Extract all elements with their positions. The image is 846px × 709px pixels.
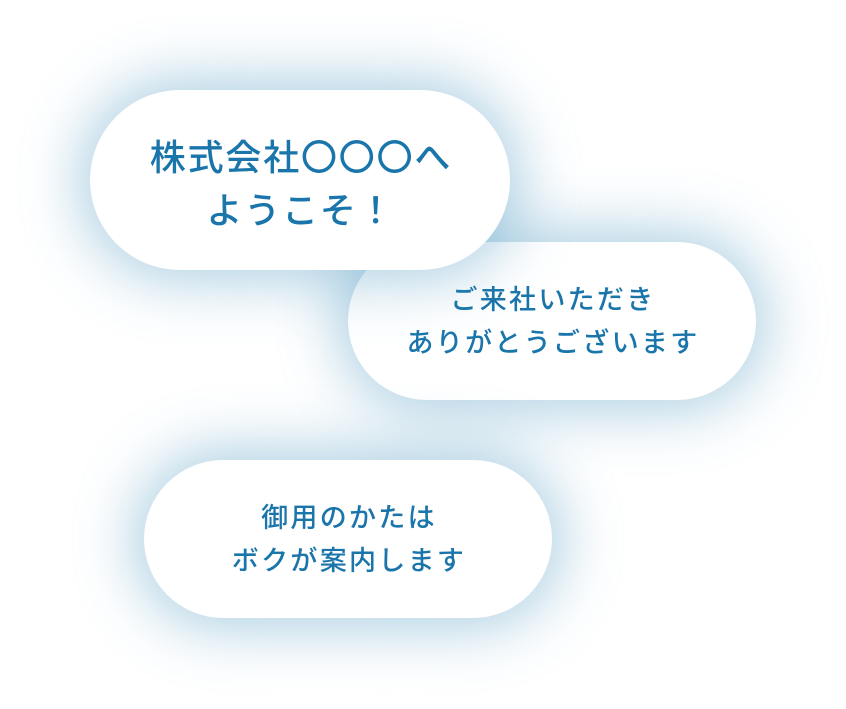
- text: welcome heading: 株式会社〇〇〇へ: [150, 137, 452, 178]
- text: welcome heading: [150, 137, 452, 231]
- text: welcome heading: ようこそ！: [206, 190, 396, 231]
- text: guidance message: ボクが案内します: [232, 546, 466, 576]
- text: guidance message: 御用のかたは: [261, 503, 437, 533]
- text: guidance message: [232, 503, 466, 576]
- text: thanks message: ご来社いただき: [450, 285, 656, 315]
- text: thanks message: ありがとうございます: [406, 328, 700, 358]
- speech bubble: thanks for visiting: [348, 242, 756, 400]
- text: thanks message: [406, 285, 700, 358]
- speech bubble: guidance: [144, 460, 552, 618]
- speech bubble: welcome: [90, 90, 510, 270]
